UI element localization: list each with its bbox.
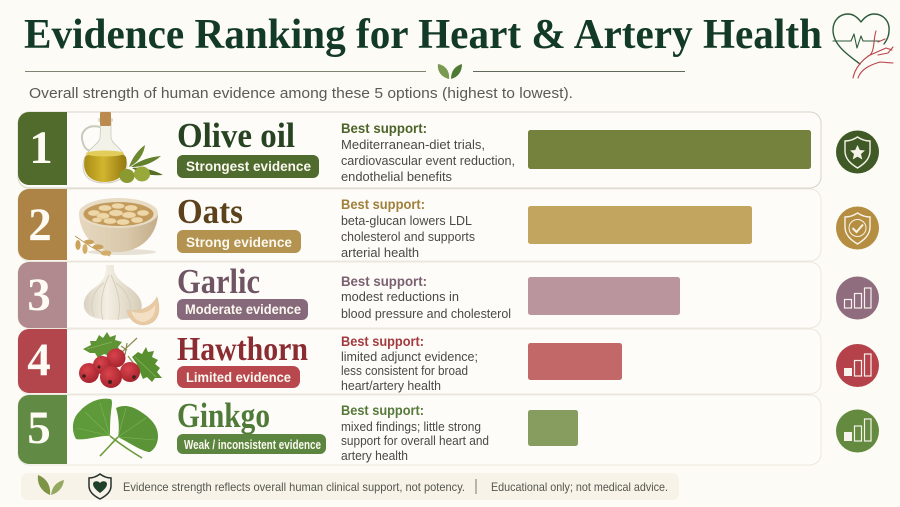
subtitle: Overall strength of human evidence among these 5 options (highest to lowest). — [29, 85, 573, 102]
name and badge: Olive oil — [177, 116, 295, 155]
rank 3 — [18, 262, 67, 328]
name and badge: Weak / inconsistent evidence — [184, 438, 321, 452]
divider with leaf — [25, 64, 685, 79]
support text: Best support: — [341, 274, 427, 289]
support text: cholesterol and supports — [341, 230, 475, 244]
name and badge: Hawthorn — [177, 331, 308, 368]
name and badge — [177, 262, 308, 320]
support text: Best support: — [341, 334, 424, 349]
icon: moderate signal bars — [836, 276, 879, 320]
name and badge: Strong evidence — [186, 235, 292, 250]
icon: shield with star — [836, 130, 879, 174]
support text: Mediterranean-diet trials, — [341, 138, 485, 152]
rank 4: 4 — [27, 334, 51, 386]
title: Evidence Ranking for Heart & Artery Health — [24, 12, 822, 58]
support text: support for overall heart and — [341, 434, 489, 448]
rank 1 — [18, 112, 67, 185]
support text: arterial health — [341, 246, 419, 260]
name and badge: Ginkgo — [177, 396, 270, 435]
footer text: Evidence strength reflects overall human clinical support, not potency. — [123, 480, 465, 494]
rank 2 — [18, 189, 67, 260]
support text: modest reductions in — [341, 290, 459, 304]
row 1: olive oil — [18, 112, 821, 188]
rank 3: 3 — [27, 269, 51, 321]
row 3: garlic — [18, 262, 821, 328]
icon: shield with check — [836, 206, 879, 250]
support text: Best support: — [341, 121, 427, 136]
support text: artery health — [341, 449, 408, 463]
name and badge: Moderate evidence — [185, 302, 301, 317]
support text — [341, 403, 489, 463]
name and badge: Limited evidence — [186, 370, 291, 385]
illustration: hawthorn berries — [79, 332, 162, 388]
support text: beta-glucan lowers LDL — [341, 214, 472, 228]
rank 5 — [18, 395, 67, 464]
name and badge: Oats — [177, 192, 243, 231]
evidence bar 4 — [528, 343, 622, 380]
icon: footer leaves — [38, 475, 64, 495]
illustration: garlic — [84, 265, 159, 325]
rank 5: 5 — [27, 402, 51, 454]
icon: limited signal bars — [836, 344, 879, 387]
support text: blood pressure and cholesterol — [341, 307, 511, 321]
support text — [341, 197, 475, 260]
name and badge — [177, 116, 319, 178]
illustration: oats bowl — [75, 198, 158, 256]
support text — [341, 121, 515, 184]
evidence bar 1 — [528, 130, 811, 169]
name and badge — [177, 331, 308, 388]
support text: limited adjunct evidence; — [341, 350, 478, 364]
support text: Best support: — [341, 197, 425, 212]
support text — [341, 274, 511, 321]
support text: endothelial benefits — [341, 170, 452, 184]
rank 2: 2 — [28, 199, 52, 251]
illustration: ginkgo leaves — [73, 399, 158, 458]
support text: less consistent for broad — [341, 364, 468, 378]
footer text — [123, 479, 668, 494]
support text: Best support: — [341, 403, 424, 418]
support text: heart/artery health — [341, 379, 441, 393]
support text: cardiovascular event reduction, — [341, 154, 515, 168]
name and badge: Strongest evidence — [186, 159, 311, 174]
evidence bar 5 — [528, 410, 578, 446]
rank 1: 1 — [29, 122, 53, 174]
support text — [341, 334, 478, 393]
icon: weak signal bars — [836, 410, 879, 452]
support text: mixed findings; little strong — [341, 420, 481, 434]
row 5: ginkgo — [18, 395, 821, 465]
illustration: olive oil bottle — [82, 112, 163, 183]
icon: shield with heart — [89, 474, 111, 499]
footer note — [21, 473, 679, 500]
row 2: oats — [18, 189, 821, 261]
evidence bar 3 — [528, 277, 680, 315]
rank 4 — [18, 329, 67, 393]
name and badge — [177, 192, 301, 253]
name and badge — [177, 396, 326, 454]
icon: heart and artery — [833, 14, 893, 78]
footer text: Educational only; not medical advice. — [491, 480, 668, 494]
name and badge: Garlic — [177, 262, 260, 301]
row 4: hawthorn — [18, 329, 821, 394]
evidence bar 2 — [528, 206, 752, 244]
